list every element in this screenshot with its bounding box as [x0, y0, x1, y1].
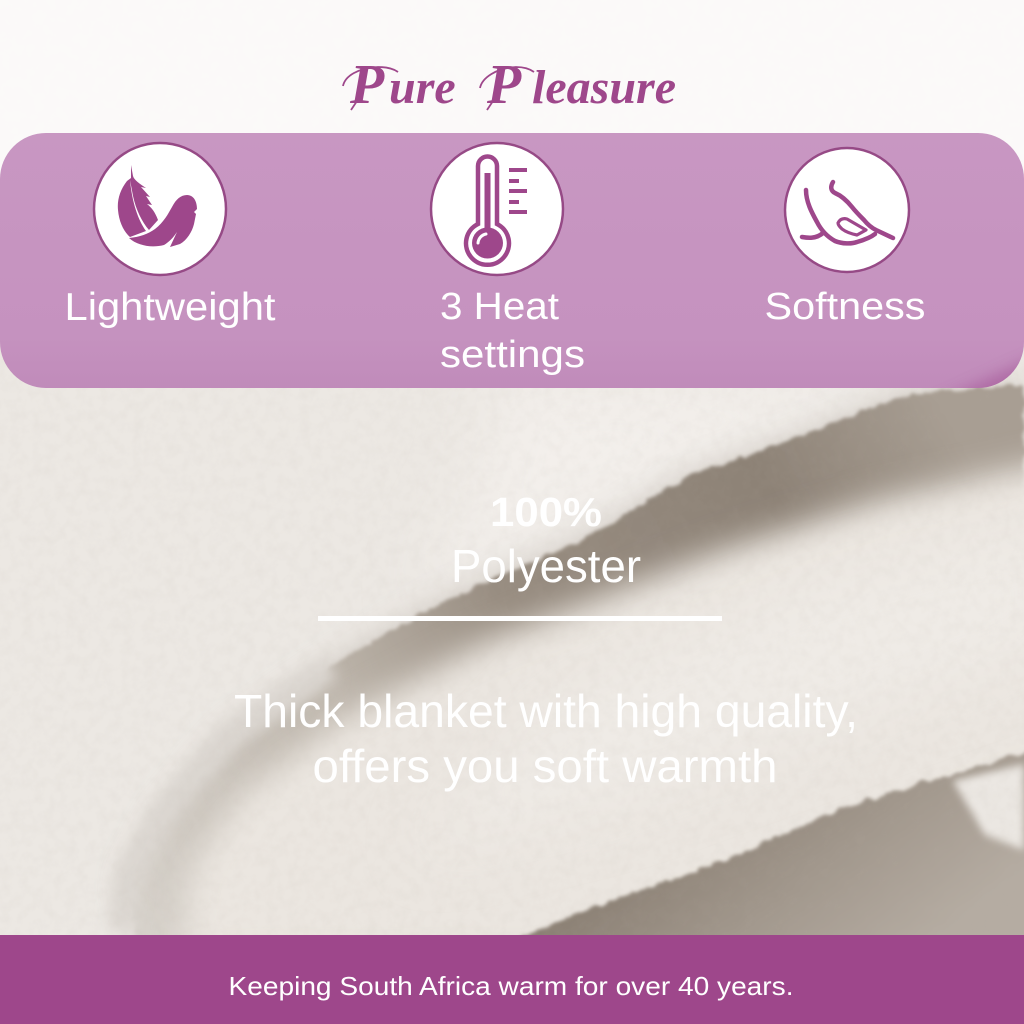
icon: feather	[94, 143, 226, 275]
text block: description: offers you soft warmth	[312, 740, 778, 792]
title: Pure Pleasure: P	[486, 54, 522, 116]
feature: heat settings	[431, 143, 585, 376]
footer bar	[0, 935, 1024, 1024]
feature: softness	[764, 148, 926, 328]
title: Pure Pleasure: leasure	[532, 61, 676, 114]
footer text: Keeping South Africa warm for over 40 years.	[228, 971, 794, 1001]
label: settings: settings	[440, 334, 585, 376]
icon: softness folded fabric	[785, 148, 909, 272]
text block: 100% Polyester	[451, 489, 641, 592]
title: Pure Pleasure: P	[349, 54, 385, 116]
title: Pure Pleasure: ure	[389, 61, 456, 114]
title: Pure Pleasure	[343, 54, 676, 116]
label: 3 Heat: 3 Heat	[440, 286, 559, 328]
panel: product features	[0, 133, 1024, 405]
label: Polyester: Polyester	[451, 540, 641, 592]
heading: 100%: 100%	[490, 489, 602, 535]
text block: description: Thick blanket with high quality,	[234, 685, 858, 737]
feature: lightweight	[64, 143, 276, 329]
text block: description	[234, 685, 858, 792]
icon: thermometer	[431, 143, 563, 275]
label: Softness: Softness	[764, 286, 926, 328]
label: Lightweight: Lightweight	[64, 286, 276, 329]
